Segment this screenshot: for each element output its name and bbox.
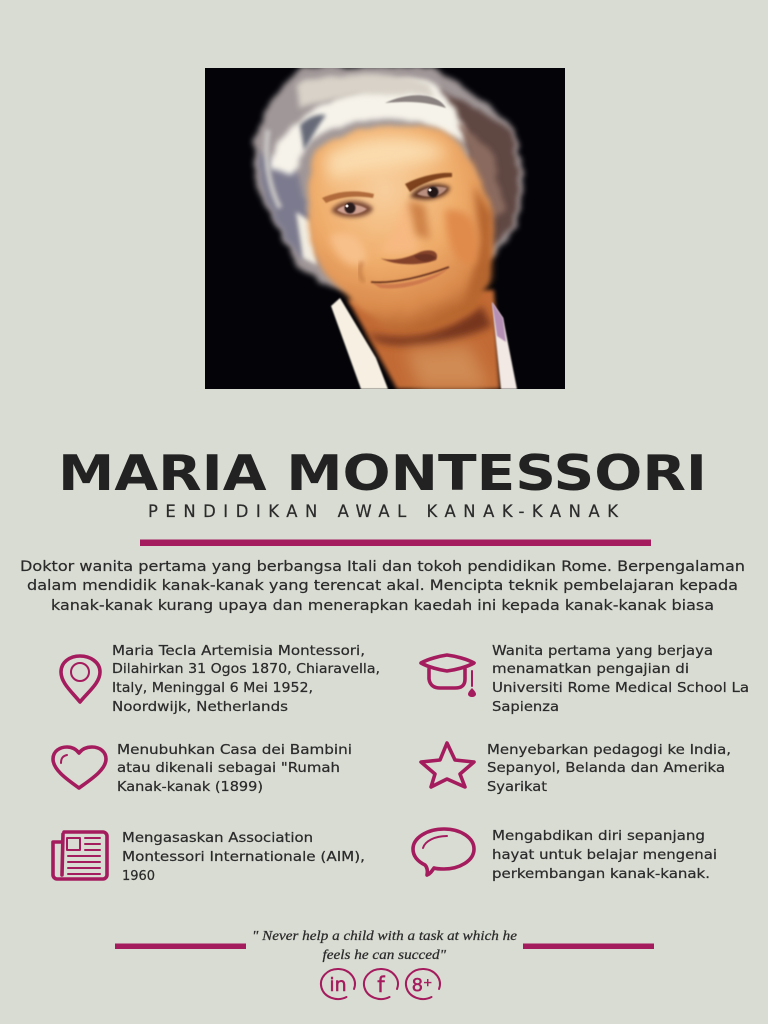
collar <box>331 298 388 389</box>
text: birth and death: Dilahirkan 31 Ogos 1870, Chiaravella, <box>112 662 380 677</box>
divider bar <box>140 540 651 546</box>
text: Casa dei Bambini <box>117 743 352 795</box>
hair mass <box>253 66 524 300</box>
quote right bar <box>523 944 654 949</box>
text: Casa dei Bambini: Kanak-kanak (1899) <box>117 780 263 795</box>
quote: feels he can succed" <box>322 947 446 962</box>
text: birth and death: Maria Tecla Artemisia Montessori, <box>112 644 365 659</box>
icon: graduation cap <box>421 655 476 697</box>
text: lifelong learning: hayat untuk belajar mengenai <box>492 848 717 863</box>
intro paragraph: dalam mendidik kanak-kanak yang terencat akal. Mencipta teknik pembelajaran kepada <box>27 578 738 594</box>
nose <box>384 235 417 255</box>
quote: " Never help a child with a task at which he <box>252 928 517 943</box>
text: Casa dei Bambini: atau dikenali sebagai "Rumah <box>117 761 340 776</box>
text: first woman graduate: Wanita pertama yang berjaya <box>492 644 713 659</box>
text: spreading pedagogy: Menyebarkan pedagogi ke India, <box>487 743 731 758</box>
intro paragraph: kanak-kanak kurang upaya dan menerapkan kaedah ini kepada kanak-kanak biasa <box>51 598 714 614</box>
mouth <box>372 268 449 289</box>
icon: star <box>421 743 474 787</box>
text: birth and death: Noordwijk, Netherlands <box>112 700 288 715</box>
icon: google plus: 8 <box>412 975 423 996</box>
text: first woman graduate: Universiti Rome Medical School La <box>492 681 749 696</box>
subtitle: PENDIDIKAN AWAL KANAK-KANAK <box>148 502 619 521</box>
intro paragraph <box>20 559 745 614</box>
text: first woman graduate: menamatkan pengajian di <box>492 662 689 677</box>
text: spreading pedagogy: Syarikat <box>487 780 547 795</box>
text: birth and death: Italy, Meninggal 6 Mei 1952, <box>112 681 313 696</box>
icon: location pin <box>61 656 100 702</box>
intro paragraph: Doktor wanita pertama yang berbangsa Itali dan tokoh pendidikan Rome. Berpengalaman <box>20 559 745 575</box>
quote <box>252 928 517 962</box>
icon: newspaper <box>53 832 107 879</box>
text: AIM association <box>122 831 365 884</box>
title: MARIA MONTESSORI <box>58 445 707 502</box>
quote left bar <box>115 944 246 949</box>
text: AIM association: 1960 <box>122 869 155 884</box>
icon: linkedin <box>321 969 355 999</box>
text: spreading pedagogy: Sepanyol, Belanda dan Amerika <box>487 761 725 776</box>
text: first woman graduate: Sapienza <box>492 700 559 715</box>
text: spreading pedagogy <box>487 743 731 795</box>
text: first woman graduate <box>492 644 749 715</box>
icon: google plus <box>406 969 440 999</box>
right eye <box>405 173 452 192</box>
icon: facebook <box>364 969 398 999</box>
text: AIM association: Montessori Internationale (AIM), <box>122 850 365 865</box>
neck <box>348 290 500 389</box>
text: lifelong learning <box>492 829 717 882</box>
left eye <box>322 191 374 203</box>
text: AIM association: Mengasaskan Association <box>122 831 313 846</box>
icon: linkedin: in <box>329 974 347 996</box>
icon: facebook: f <box>377 973 385 997</box>
icon: speech bubble <box>413 829 474 875</box>
portrait photo <box>205 66 565 389</box>
text: Casa dei Bambini: Menubuhkan Casa dei Bambini <box>117 743 352 758</box>
icon: heart <box>53 747 106 788</box>
text: lifelong learning: Mengabdikan diri sepanjang <box>492 829 705 844</box>
text: birth and death <box>112 644 380 715</box>
text: lifelong learning: perkembangan kanak-kanak. <box>492 867 710 882</box>
face <box>308 125 493 330</box>
icon: google plus: + <box>423 976 432 989</box>
